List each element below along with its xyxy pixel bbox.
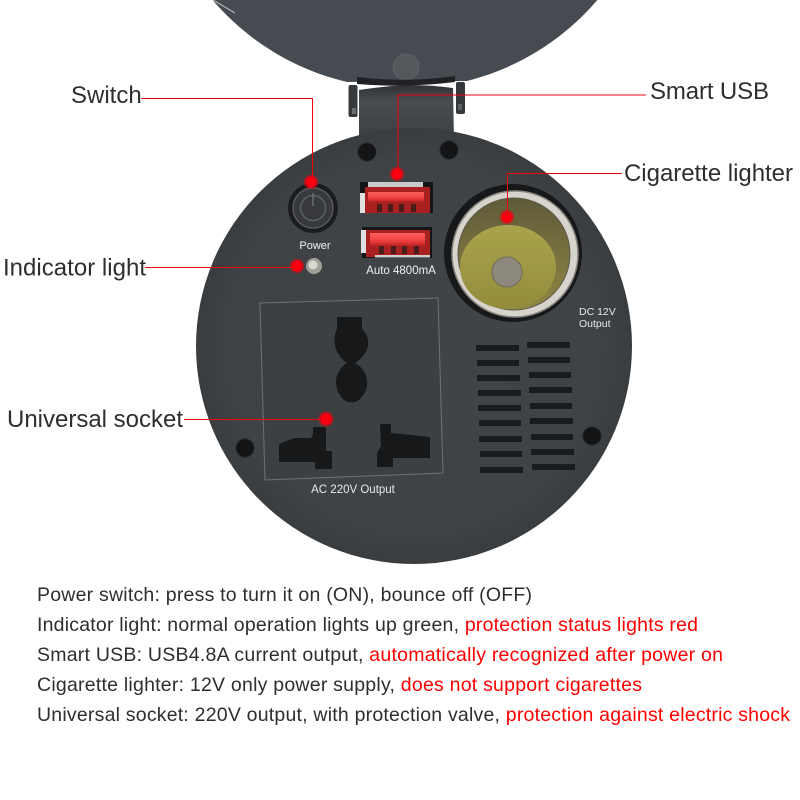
main device body [196,128,632,564]
callout: Cigarette lighter [499,160,793,225]
screws [236,141,601,457]
label: AC 220V Output: AC 220V Output [311,484,396,496]
left pin hole [279,427,332,469]
callout: Indicator light: Indicator light [3,254,146,282]
icon: power switch [288,183,338,233]
cigarette lighter socket [444,184,582,322]
universal socket [260,298,443,480]
USB port bottom [361,227,432,258]
lid of the device [152,0,658,82]
USB port top [360,182,433,213]
line: power switch: Power switch: press to turn it on (ON), bounce off (OFF) [37,584,532,606]
label: Auto 4800mA: Auto 4800mA [366,265,436,277]
line: indicator light: Indicator light: normal operation lights up green, protection status lights red [37,614,698,636]
callout: Cigarette lighter: Cigarette lighter [624,160,793,187]
line: universal socket: Universal socket: 220V output, with protection valve, protection against electric shock [37,704,790,726]
line: smart USB: Smart USB: USB4.8A current output, automatically recognized after power on [37,644,723,666]
hinge [348,76,465,140]
top earth hole [334,317,368,402]
callout: Switch [71,82,319,190]
label: Power: Power [299,240,331,252]
description text block [37,584,790,726]
callout: Smart USB: Smart USB [650,78,769,105]
line: cigarette lighter: Cigarette lighter: 12V only power supply, does not support cigarettes [37,674,642,696]
right pin hole [377,424,430,467]
callout: Indicator light [3,254,305,282]
callout: Universal socket [7,406,334,433]
callout: Smart USB [389,78,769,182]
callout: Switch: Switch [71,82,142,109]
icon: indicator LED [306,258,322,274]
label: DC 12V Output: DC 12V [579,306,616,318]
ventilation grille [476,342,575,473]
label: DC 12V Output: Output [579,318,611,330]
label: DC 12V Output [579,306,616,330]
callout: Universal socket: Universal socket [7,406,183,433]
